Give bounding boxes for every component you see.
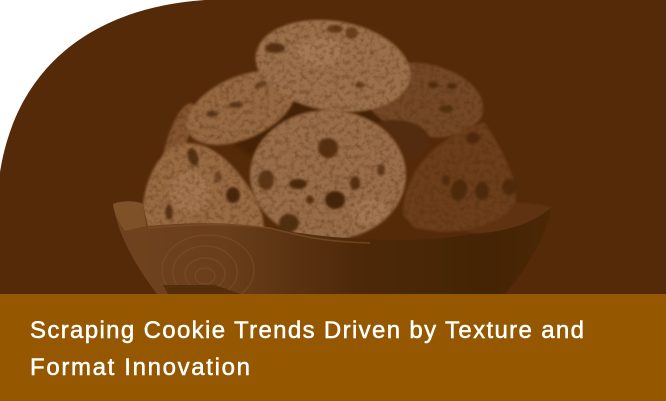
right rim cookie xyxy=(470,204,550,233)
title band xyxy=(0,294,666,401)
back shadow xyxy=(236,102,382,156)
wooden bowl xyxy=(113,201,552,294)
left upper cookie xyxy=(186,70,294,146)
sliver cookie xyxy=(162,102,194,156)
title text xyxy=(30,317,584,381)
corner cut-out xyxy=(0,0,205,172)
left cookie xyxy=(143,143,264,232)
title text: Format Innovation xyxy=(30,354,250,381)
top cookie xyxy=(254,18,412,113)
right upper cookie xyxy=(371,62,484,138)
wood grain rings xyxy=(162,234,254,294)
photo panel: cookies in a bowl xyxy=(0,0,666,305)
cookie pile xyxy=(113,9,553,305)
center cookie xyxy=(250,110,406,240)
title text: Scraping Cookie Trends Driven by Texture and xyxy=(30,317,584,344)
back middle cookie xyxy=(378,119,429,157)
right cookie xyxy=(403,122,516,232)
